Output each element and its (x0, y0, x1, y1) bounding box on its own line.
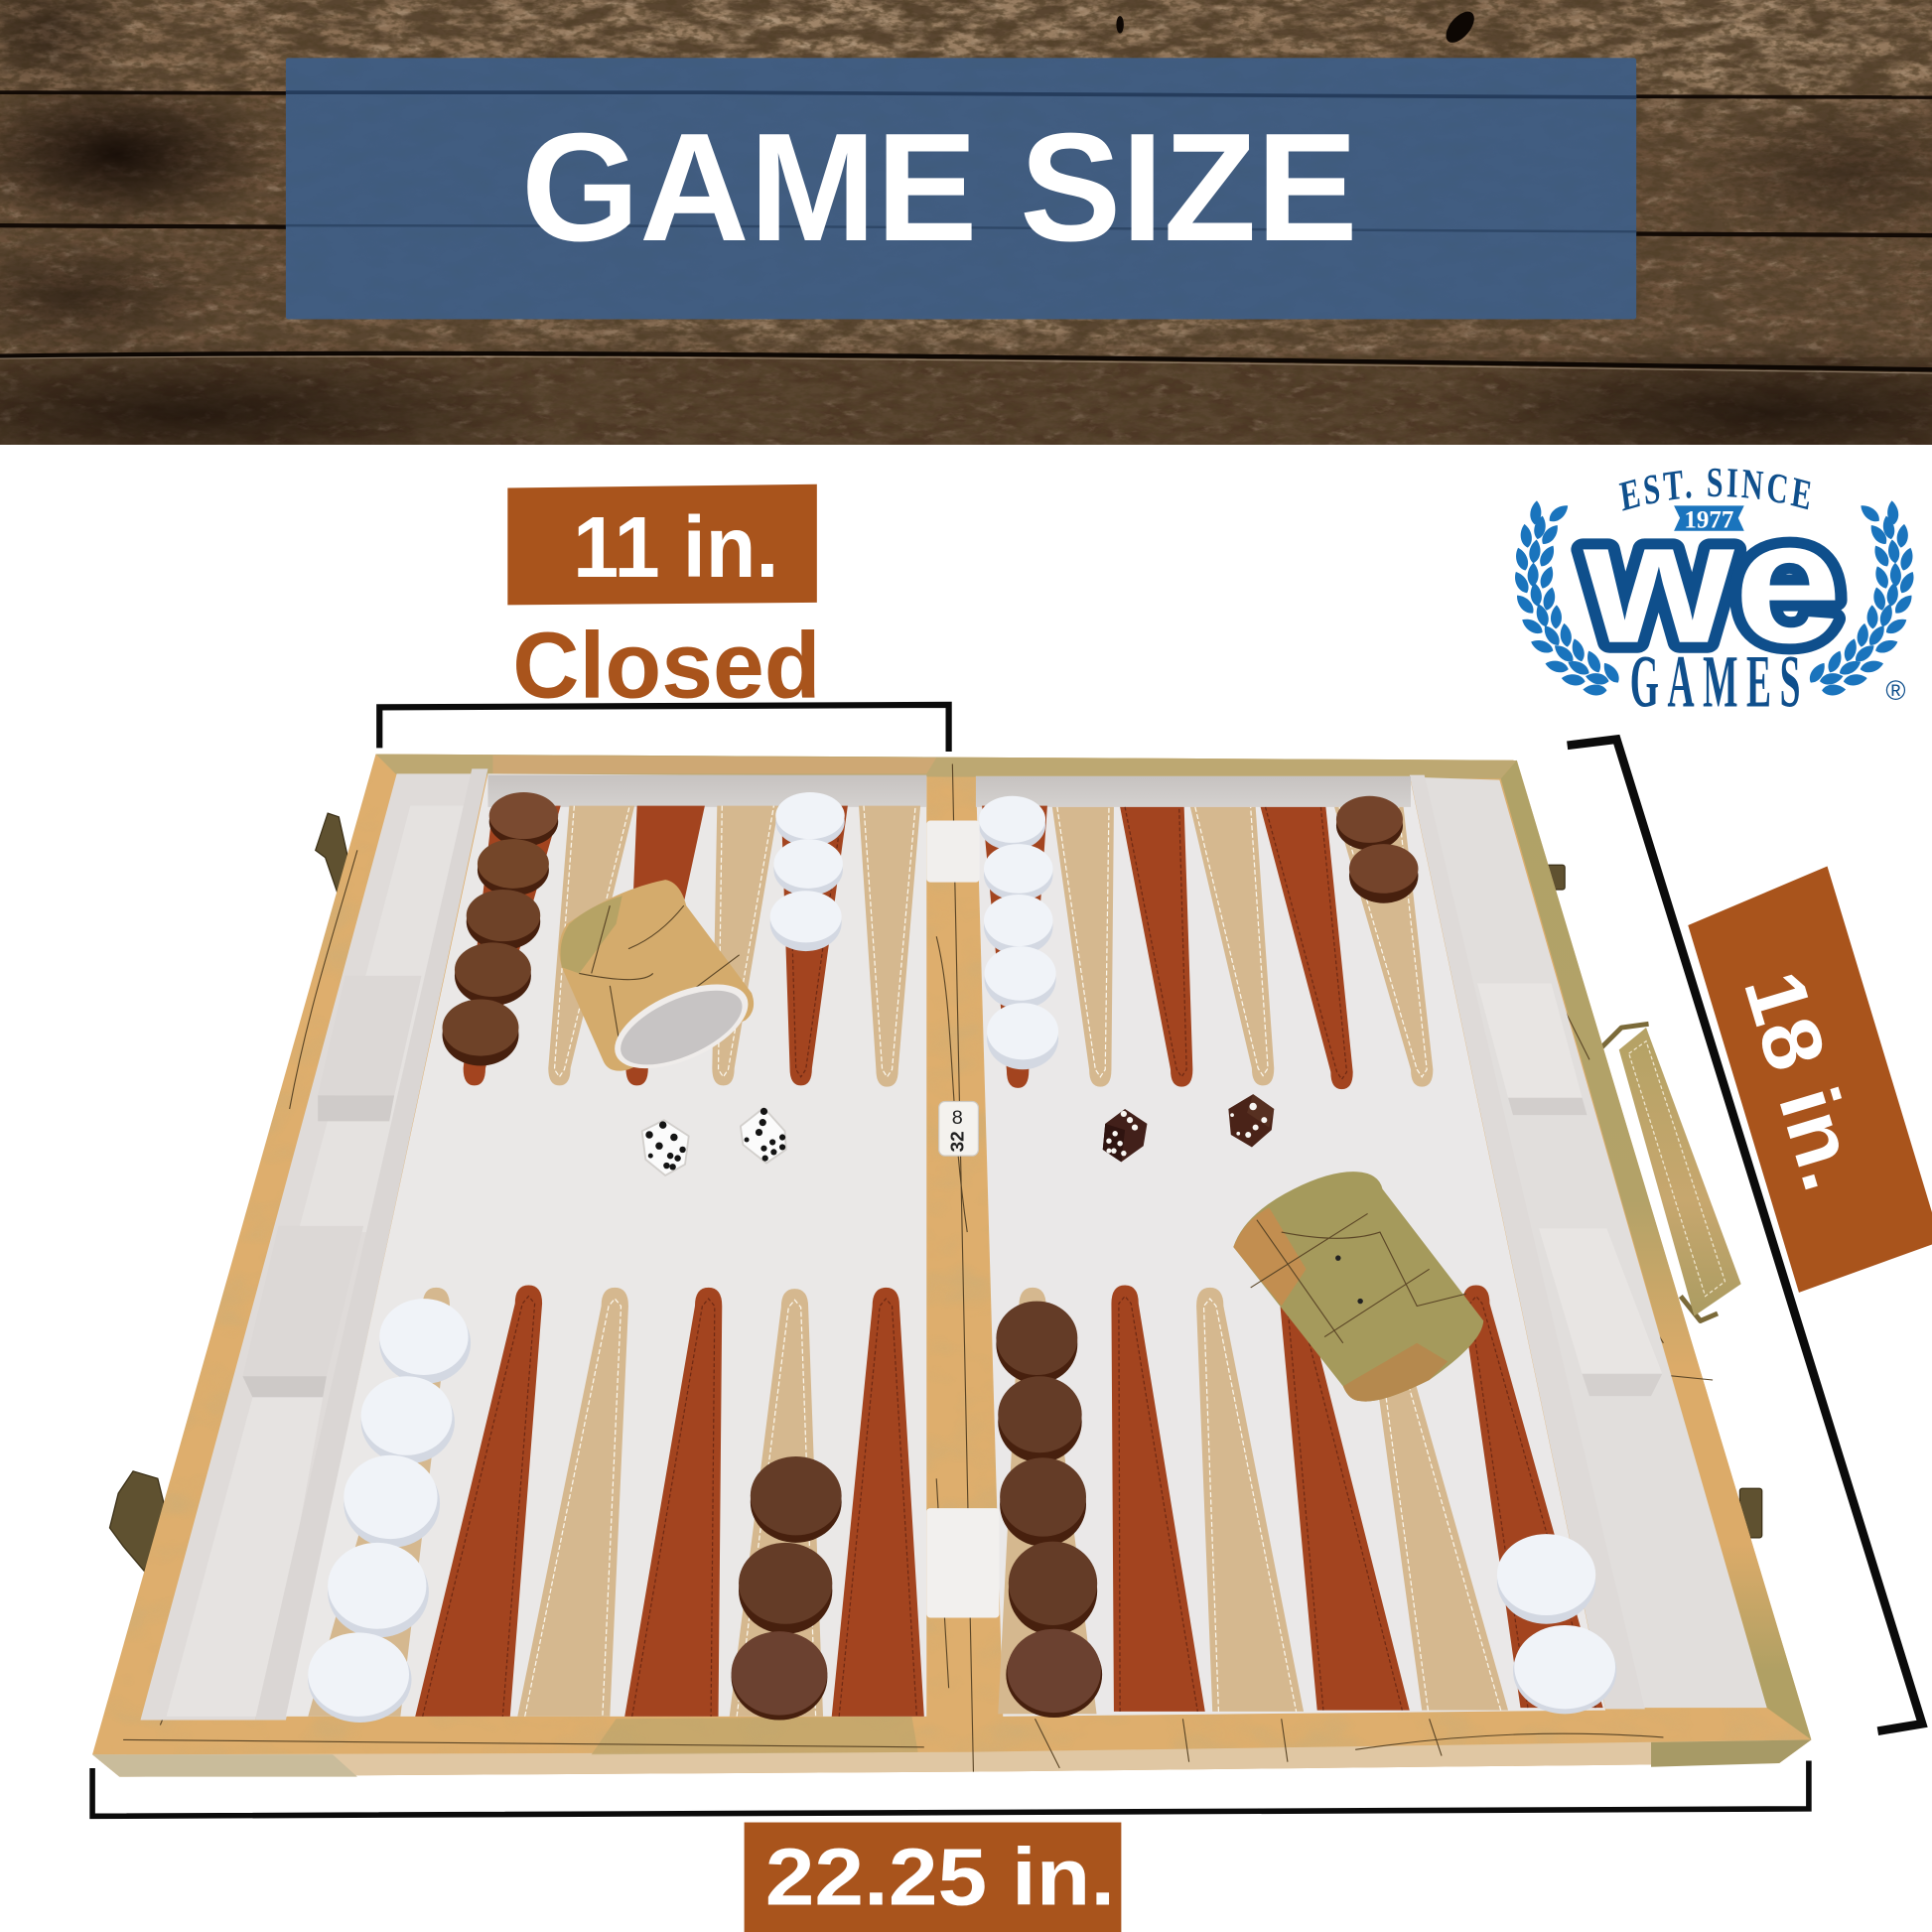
label: 18 in. (1688, 866, 1932, 1293)
label: 11 in. closed: Closed (512, 613, 821, 717)
checkers: white top right (979, 796, 1058, 1069)
blue title banner (286, 58, 1636, 319)
checkers: white top left (770, 792, 845, 951)
checkers: brown top right (1336, 796, 1418, 903)
bracket: depth (1568, 740, 1922, 1731)
title: GAME SIZE (521, 101, 1358, 273)
logo text: games: GAMES (1630, 640, 1800, 723)
playfield felt left (286, 773, 926, 1717)
label: 22.25 in.: 22.25 in. (765, 1833, 1115, 1923)
logo: WE Games (1515, 469, 1914, 749)
strap: bottom (926, 1508, 1000, 1618)
latches (109, 813, 1762, 1571)
logo banner: 1977: 1977 (1684, 505, 1734, 533)
points: bottom left (308, 1285, 924, 1717)
checkers: brown bottom right (996, 1302, 1102, 1718)
label: 18 in.: 18 in. (1726, 961, 1879, 1200)
left tray (140, 773, 475, 1721)
points: top right (982, 806, 1433, 1089)
strap: top (926, 821, 980, 883)
checkers: white bottom right (1497, 1534, 1616, 1714)
white die: left (642, 1120, 689, 1175)
header: wood background (0, 0, 1932, 486)
doubling cube: 32 (947, 1131, 968, 1152)
registered mark: ® (1885, 675, 1906, 706)
logo text: est since: EST. SINCE (1618, 469, 1811, 511)
right tray (1425, 777, 1767, 1708)
doubling cube (939, 1102, 978, 1156)
checkers: white bottom left (308, 1299, 471, 1723)
checkers: brown top left (443, 792, 558, 1066)
label: 11 in. closed (507, 484, 821, 717)
logo text: est since (1618, 469, 1811, 511)
playfield felt right (976, 776, 1605, 1717)
back wall shadow bands (487, 775, 1411, 807)
doubling cube: 8 (952, 1107, 963, 1129)
points: bottom right (998, 1285, 1603, 1714)
laurel wreath left (1511, 500, 1622, 696)
left rail (255, 768, 487, 1721)
dice cup: right (1233, 1172, 1483, 1402)
bracket: closed width (379, 705, 949, 752)
laurel wreath right (1806, 500, 1918, 696)
logo wordmark: we: we (1583, 484, 1842, 680)
dark die: right (1228, 1094, 1274, 1147)
points: top left (464, 806, 920, 1087)
bracket: width (92, 1760, 1809, 1816)
dice cup: left (559, 880, 760, 1086)
handle (1601, 1024, 1741, 1320)
white die: right (741, 1108, 786, 1164)
case frame (92, 755, 1811, 1777)
backgammon board (92, 755, 1811, 1777)
dark die: left (1103, 1109, 1147, 1162)
label: 11 in. closed: 11 in. (573, 499, 778, 596)
checkers: brown bottom left (732, 1456, 842, 1721)
right rail (1410, 775, 1645, 1709)
